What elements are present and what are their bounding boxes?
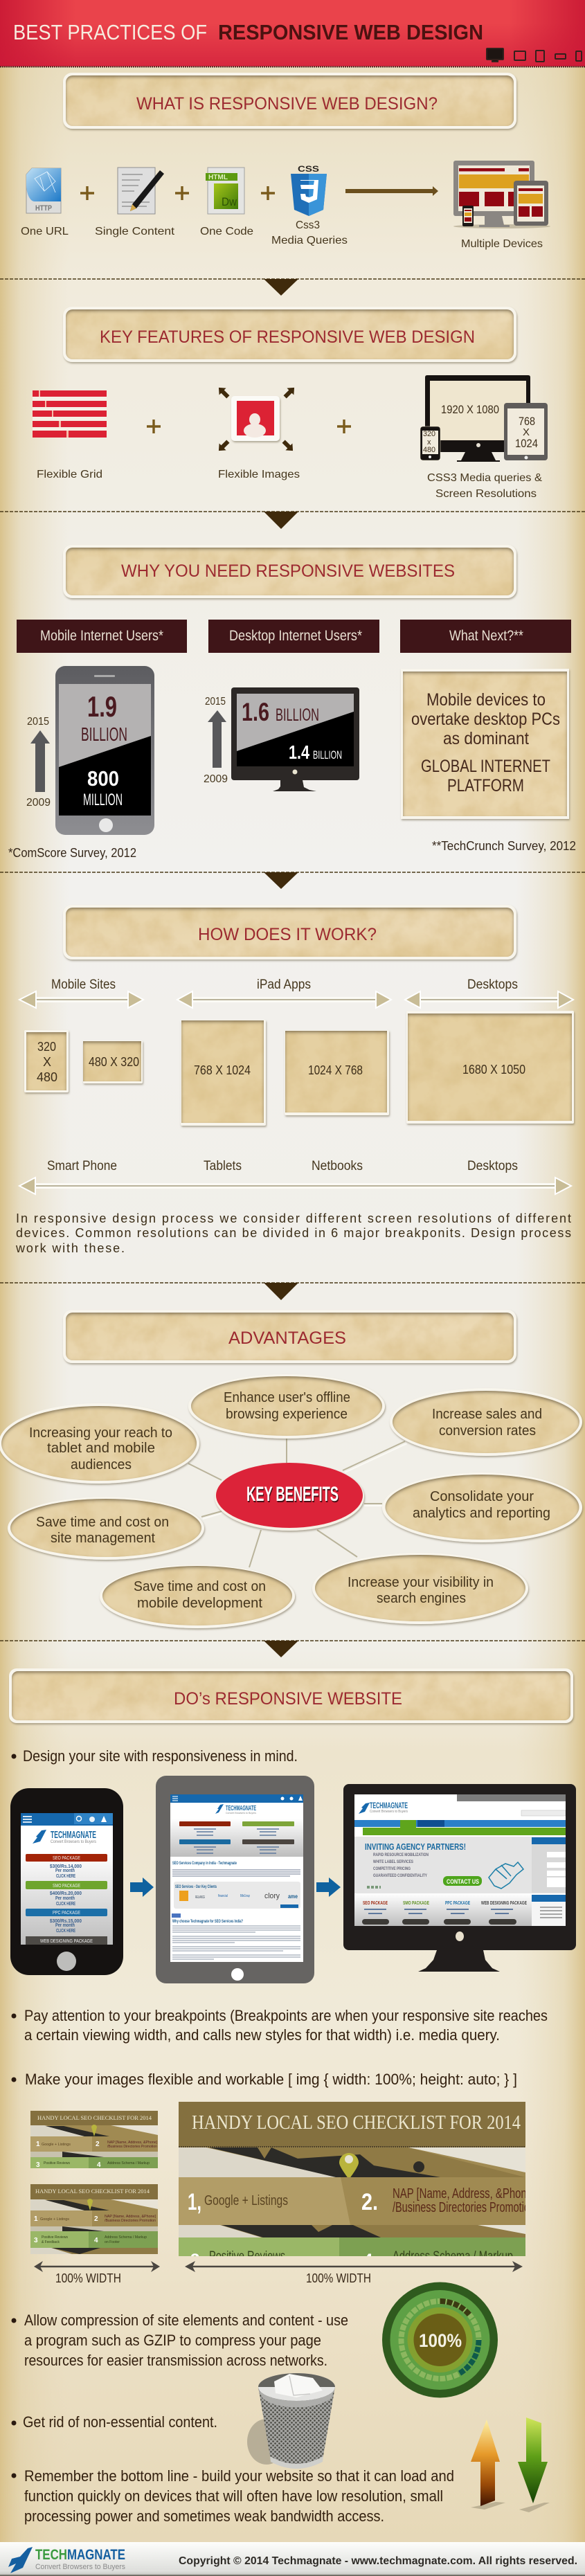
panel: do's responsive website bbox=[9, 1668, 576, 2525]
phone mockup: $300/Rs.15,000 bbox=[50, 1919, 82, 1924]
plus bbox=[175, 186, 189, 200]
header banner bbox=[0, 0, 585, 66]
icon: screen resolutions devices: Screen Resolutions bbox=[435, 488, 537, 500]
panel: key features bbox=[33, 307, 548, 500]
arrow: small image width: 100% WIDTH bbox=[55, 2271, 121, 2285]
box: 1680x1050 bbox=[406, 1011, 574, 1124]
text block: breakpoints: In responsive design process we consider different screen resolutions of different bbox=[16, 1212, 571, 1225]
text: bottom line tip bbox=[11, 2467, 454, 2525]
device type labels bbox=[47, 1159, 518, 1173]
phone mockup: CLICK HERE bbox=[56, 1929, 75, 1934]
breakpoint group labels: iPad Apps bbox=[257, 978, 311, 992]
arrow: up bbox=[471, 2420, 505, 2510]
text block: breakpoints bbox=[15, 1212, 571, 1255]
monitor mockup bbox=[343, 1784, 576, 1972]
text: design with responsiveness: Design your site with responsiveness in mind. bbox=[23, 1747, 298, 1765]
bubble: offline browsing: Enhance user's offline bbox=[224, 1390, 350, 1405]
heading box bbox=[9, 1668, 573, 1723]
desktop users monitor chart: 1.4 bbox=[289, 741, 309, 763]
box: 320x480: 480 bbox=[37, 1070, 57, 1084]
divider with arrow bbox=[0, 512, 585, 529]
small checklist image 1: 1 bbox=[36, 2141, 40, 2148]
bubble: mobile development: mobile development bbox=[137, 1596, 262, 1611]
label: Flexible Grid bbox=[37, 469, 102, 480]
panel: advantages bbox=[0, 1310, 582, 1628]
mobile users phone chart: 1.9 bbox=[87, 690, 117, 723]
bubble: key benefits: KEY BENEFITS bbox=[247, 1484, 339, 1507]
small checklist image 2: NAP [Name, Address, &Phone] bbox=[105, 2215, 156, 2219]
resolution labels: 768 bbox=[519, 415, 535, 428]
plus bbox=[147, 420, 161, 433]
desktop users monitor chart: 1.6 bbox=[242, 698, 269, 726]
logo: TECHMAGNATE bbox=[35, 2547, 125, 2563]
phone mockup: CLICK HERE bbox=[56, 1902, 75, 1907]
title: RESPONSIVE WEB DESIGN bbox=[218, 20, 483, 44]
icon: css3 shield: CSS bbox=[298, 164, 319, 174]
small checklist image 2: on Footer bbox=[105, 2240, 120, 2244]
logo: Convert Browsers to Buyers bbox=[35, 2563, 125, 2571]
large checklist image: Google + Listings bbox=[204, 2193, 288, 2208]
heading box: ADVANTAGES bbox=[228, 1328, 346, 1348]
arrow bbox=[345, 186, 438, 196]
box: 320x480: 320 bbox=[37, 1040, 56, 1054]
small checklist image 2: & Feedback bbox=[42, 2240, 60, 2244]
column header: what next bbox=[400, 620, 571, 653]
footnote: comscore: *ComScore Survey, 2012 bbox=[8, 846, 136, 860]
arrow: mobile sites range bbox=[19, 991, 143, 1008]
bubble: search visibility: search engines bbox=[377, 1591, 466, 1606]
phone mockup: SMO PACKAGE bbox=[53, 1884, 80, 1889]
label: Css3 bbox=[296, 219, 320, 231]
tablet mockup: Convert Browsers to Buyers bbox=[226, 1811, 256, 1814]
small checklist image 2: Address Schema / Markup bbox=[105, 2235, 147, 2240]
monitor mockup: COMPETITIVE PRICING bbox=[373, 1866, 411, 1871]
box: 768x1024 bbox=[181, 1020, 266, 1126]
icon: one code: HTML bbox=[208, 174, 228, 181]
icon: flexible grid bbox=[33, 390, 107, 480]
small checklist image 2 bbox=[30, 2184, 158, 2254]
text: compression tip: resources for easier transmission across networks. bbox=[24, 2352, 327, 2369]
small checklist image 2: 3 bbox=[34, 2237, 38, 2244]
tablet mockup: BillsGroup bbox=[240, 1894, 250, 1898]
phone mockup bbox=[10, 1788, 123, 1975]
monitor mockup: SMO PACKAGE bbox=[403, 1901, 429, 1906]
desktop growth arrow: 2015 bbox=[205, 696, 226, 708]
bubble: reach: audiences bbox=[71, 1457, 132, 1472]
box: 768x1024: 768 X 1024 bbox=[194, 1063, 251, 1077]
heading box: KEY FEATURES OF RESPONSIVE WEB DESIGN bbox=[100, 327, 475, 347]
resolution labels: 1024 bbox=[515, 437, 538, 450]
callout: what next: PLATFORM bbox=[447, 776, 524, 795]
resolution labels: 320 bbox=[423, 430, 435, 438]
icon: css3 shield bbox=[271, 164, 348, 246]
mobile users phone chart bbox=[55, 666, 154, 835]
heading box bbox=[63, 545, 516, 598]
monitor mockup: RAPID RESOURCE MOBILIZATION bbox=[373, 1853, 429, 1857]
label: Single Content bbox=[95, 226, 175, 237]
breakpoint group labels: Mobile Sites bbox=[51, 978, 116, 992]
large checklist image: HANDY LOCAL SEO CHECKLIST FOR 2014 bbox=[192, 2111, 521, 2134]
tablet mockup: Why choose Techmagnate for SEO Services India? bbox=[172, 1920, 243, 1924]
column header: desktop bbox=[208, 620, 379, 653]
label: Multiple Devices bbox=[461, 238, 543, 250]
bubble: mobile development: Save time and cost on bbox=[134, 1579, 266, 1594]
arrow bbox=[130, 1877, 154, 1897]
small checklist image 1 bbox=[30, 2111, 158, 2169]
desktop growth arrow bbox=[204, 696, 228, 785]
small checklist image 2: 1 bbox=[34, 2215, 38, 2223]
device type labels: Desktops bbox=[467, 1159, 518, 1173]
callout: what next bbox=[401, 669, 569, 819]
title bbox=[13, 20, 483, 44]
tablet mockup: ame bbox=[288, 1893, 298, 1900]
bubble: site management bbox=[8, 1497, 204, 1560]
heading box: WHAT IS RESPONSIVE WEB DESIGN? bbox=[136, 94, 438, 114]
heading box bbox=[63, 73, 516, 129]
bubble: analytics: analytics and reporting bbox=[413, 1506, 550, 1521]
mobile growth arrow: 2009 bbox=[26, 797, 51, 809]
phone mockup: $300/Rs.14,000 bbox=[50, 1864, 82, 1869]
desktop growth arrow: 2009 bbox=[204, 773, 228, 785]
small checklist image 1: 3 bbox=[36, 2161, 40, 2169]
plus bbox=[261, 186, 275, 200]
bubble: reach: tablet and mobile bbox=[47, 1441, 155, 1456]
label: CSS3 Media queries & bbox=[427, 472, 542, 484]
column header: what next: What Next?** bbox=[449, 628, 523, 644]
column header: desktop: Desktop Internet Users* bbox=[229, 628, 362, 644]
heading box: HOW DOES IT WORK? bbox=[198, 925, 377, 944]
desktop users monitor chart bbox=[231, 687, 359, 791]
phone mockup: Convert Browsers to Buyers bbox=[51, 1840, 96, 1844]
monitor mockup: INVITING AGENCY PARTNERS! bbox=[365, 1841, 466, 1852]
bubble: sales bbox=[390, 1388, 582, 1456]
small checklist image 1: Positive Reviews bbox=[44, 2161, 70, 2165]
small checklist image 1: Google + Listings bbox=[42, 2143, 71, 2147]
large checklist image: 4 bbox=[363, 2251, 373, 2269]
tablet mockup: TECHMAGNATE bbox=[226, 1805, 256, 1812]
arrow: large image width: 100% WIDTH bbox=[306, 2271, 371, 2285]
gauge: 100% bbox=[382, 2282, 498, 2398]
tablet mockup: clory bbox=[264, 1892, 280, 1900]
large checklist image: 1, bbox=[188, 2189, 201, 2215]
icon: css3 shield: Media Queries bbox=[271, 235, 348, 246]
phone mockup: Per month bbox=[55, 1868, 75, 1873]
text: breakpoints tip: a certain viewing width, and calls new styles for that width) i.e. media query. bbox=[24, 2026, 500, 2044]
small checklist image 1: 2 bbox=[96, 2141, 100, 2148]
arrow bbox=[316, 1877, 341, 1897]
box: 480x320: 480 X 320 bbox=[89, 1055, 139, 1069]
label: One URL bbox=[21, 226, 69, 237]
small checklist image 2: HANDY LOCAL SEO CHECKLIST FOR 2014 bbox=[35, 2188, 150, 2195]
arrow: large image width bbox=[185, 2261, 523, 2285]
box: 1680x1050: 1680 X 1050 bbox=[462, 1063, 525, 1077]
resolution labels: X bbox=[523, 426, 530, 438]
arrow: ipad apps range bbox=[177, 991, 391, 1008]
large checklist image bbox=[179, 2102, 525, 2256]
mobile growth arrow: 2015 bbox=[27, 716, 49, 728]
resolution labels: 480 bbox=[423, 446, 435, 454]
arrow: device range bbox=[19, 1178, 571, 1194]
copyright: Copyright © 2014 Techmagnate - www.techmagnate.com. All rights reserved. bbox=[179, 2555, 577, 2567]
tablet mockup: SEO Services - Our Key Clients bbox=[175, 1885, 217, 1889]
icon: single content bbox=[95, 168, 175, 237]
arrow: small image width bbox=[34, 2261, 160, 2285]
monitor mockup: CONTACT US bbox=[447, 1878, 479, 1885]
bubble: mobile development bbox=[100, 1565, 295, 1628]
heading box bbox=[63, 905, 516, 960]
title: BEST PRACTICES OF bbox=[13, 20, 207, 44]
icon: one URL bbox=[21, 168, 69, 237]
connectors bbox=[188, 1439, 407, 1567]
plus bbox=[337, 420, 351, 433]
small checklist image 1: HANDY LOCAL SEO CHECKLIST FOR 2014 bbox=[37, 2115, 152, 2121]
text: flexible images tip: Make your images flexible and workable [ img { width: 100%; height: auto; } ] bbox=[25, 2071, 517, 2088]
monitor mockup: PPC PACKAGE bbox=[445, 1901, 470, 1906]
heading box: DO’s RESPONSIVE WEBSITE bbox=[174, 1689, 402, 1709]
resolution labels bbox=[423, 403, 538, 454]
bubble: offline browsing bbox=[188, 1374, 385, 1439]
text: bottom line tip: processing power and sometimes weak bandwidth access. bbox=[24, 2507, 384, 2525]
bubble: analytics: Consolidate your bbox=[430, 1489, 534, 1504]
small checklist image 1: NAP [Name, Address, &Phone] bbox=[107, 2141, 157, 2145]
small checklist image 2: Google + Listings bbox=[40, 2217, 69, 2222]
icon: multiple devices bbox=[453, 161, 550, 250]
box: 1024x768: 1024 X 768 bbox=[308, 1063, 363, 1077]
heading box bbox=[63, 307, 516, 362]
label: One Code bbox=[200, 226, 253, 237]
label: Flexible Images bbox=[218, 469, 300, 480]
panel: why you need responsive websites bbox=[8, 545, 576, 860]
arrow: down bbox=[518, 2417, 550, 2512]
footer bbox=[0, 2542, 585, 2576]
footnote: techcrunch: **TechCrunch Survey, 2012 bbox=[432, 839, 576, 853]
large checklist image: 2. bbox=[361, 2189, 378, 2215]
icon: screen resolutions devices bbox=[420, 375, 548, 500]
text block: breakpoints: devices. Common resolutions can be divided in 6 major breakponits. Design process bbox=[16, 1226, 571, 1240]
mobile users phone chart: 800 bbox=[87, 766, 119, 791]
resolution labels: x bbox=[427, 438, 431, 447]
bubble: analytics bbox=[382, 1472, 582, 1542]
desktop users monitor chart: BILLION bbox=[276, 705, 319, 725]
bubble: reach bbox=[0, 1403, 199, 1484]
text: breakpoints tip: Pay attention to your breakpoints (Breakpoints are when your responsive site reaches bbox=[24, 2007, 548, 2024]
bubble: search visibility: Increase your visibility in bbox=[348, 1575, 494, 1590]
monitor mockup: SEO PACKAGE bbox=[363, 1901, 388, 1906]
bubble: reach: Increasing your reach to bbox=[29, 1425, 172, 1441]
panel: how does it work bbox=[15, 905, 574, 1255]
mobile growth arrow bbox=[26, 716, 51, 809]
mobile users phone chart: BILLION bbox=[81, 723, 127, 745]
small checklist image 2: 2 bbox=[94, 2215, 98, 2223]
text: compression tip: a program such as GZIP to compress your page bbox=[24, 2332, 321, 2349]
icon: one URL: HTTP bbox=[35, 204, 52, 213]
bubble: search visibility bbox=[312, 1553, 528, 1624]
monitor mockup: WEB DESIGNING PACKAGE bbox=[481, 1901, 527, 1906]
resolution labels: 1920 X 1080 bbox=[441, 403, 499, 416]
monitor mockup: TECHMAGNATE bbox=[370, 1801, 408, 1810]
device type labels: Smart Phone bbox=[47, 1159, 117, 1173]
text: bottom line tip: function quickly on devices that will often have low resolution, small bbox=[24, 2487, 443, 2505]
large checklist image: /Business Directories Promotion bbox=[393, 2200, 535, 2215]
phone mockup: SEO PACKAGE bbox=[53, 1856, 80, 1861]
text: compression tip: Allow compression of site elements and content - use bbox=[24, 2312, 348, 2329]
bubble: sales: conversion rates bbox=[439, 1423, 536, 1439]
divider with arrow bbox=[0, 1283, 585, 1300]
tablet mockup bbox=[156, 1776, 314, 1983]
phone mockup: PPC PACKAGE bbox=[53, 1911, 80, 1916]
large checklist image: 3 bbox=[190, 2251, 199, 2269]
phone mockup: $400/Rs.20,000 bbox=[50, 1891, 82, 1896]
text: breakpoints tip bbox=[11, 2007, 548, 2044]
box: 1024x768 bbox=[285, 1030, 389, 1115]
large checklist image: Positive Reviews bbox=[209, 2249, 285, 2264]
breakpoint group labels: Desktops bbox=[467, 978, 518, 992]
tablet mockup: SEO Services Company in India - Techmagnate bbox=[172, 1862, 237, 1866]
small checklist image 2: /Business Directories Promotion bbox=[105, 2219, 156, 2223]
icon: trash can bbox=[247, 2373, 335, 2469]
phone mockup: WEB DESIGNING PACKAGE bbox=[40, 1939, 93, 1944]
icon: device sizes bbox=[487, 48, 582, 62]
monitor mockup: GUARANTEED CONFIDENTIALITY bbox=[373, 1873, 427, 1878]
icon: one code bbox=[200, 168, 253, 237]
phone mockup: CLICK HERE bbox=[56, 1874, 75, 1879]
divider with arrow bbox=[0, 1641, 585, 1657]
desktop users monitor chart: BILLION bbox=[313, 748, 342, 762]
small checklist image 1: /Business Directories Promotion bbox=[107, 2145, 157, 2149]
column header: mobile: Mobile Internet Users* bbox=[40, 628, 163, 644]
text: non-essential content tip: Get rid of non-essential content. bbox=[23, 2413, 217, 2431]
text block: breakpoints: work with these. bbox=[15, 1241, 125, 1255]
tablet mockup: RELIANCE bbox=[195, 1895, 205, 1900]
bubble: key benefits: KEY BENEFITS bbox=[246, 1483, 339, 1506]
divider with arrow bbox=[0, 279, 585, 296]
tablet mockup: financial bbox=[218, 1894, 228, 1898]
heading box: WHY YOU NEED RESPONSIVE WEBSITES bbox=[121, 561, 455, 581]
bubble: offline browsing: browsing experience bbox=[226, 1407, 348, 1422]
device type labels: Tablets bbox=[204, 1159, 242, 1173]
breakpoint group labels bbox=[51, 978, 518, 992]
phone mockup: TECHMAGNATE bbox=[51, 1829, 96, 1841]
bubble: site management: site management bbox=[51, 1531, 155, 1546]
monitor mockup: WHITE LABEL SERVICES bbox=[373, 1859, 413, 1864]
callout: what next: overtake desktop PCs bbox=[411, 710, 560, 729]
monitor mockup: Convert Browsers to Buyers bbox=[370, 1810, 408, 1814]
text: compression tip bbox=[11, 2312, 348, 2369]
callout: what next: as dominant bbox=[443, 729, 529, 748]
callout: what next: GLOBAL INTERNET bbox=[421, 757, 550, 776]
box: 320x480 bbox=[24, 1030, 69, 1092]
bubble: site management: Save time and cost on bbox=[36, 1515, 169, 1530]
phone mockup: Per month bbox=[55, 1896, 75, 1901]
text: bottom line tip: Remember the bottom line - build your website so that it can load and bbox=[24, 2467, 454, 2485]
logo bbox=[8, 2547, 125, 2573]
large checklist image: NAP [Name, Address, &Phone bbox=[393, 2186, 532, 2201]
gauge: 100%: 100% bbox=[419, 2330, 462, 2351]
divider with arrow bbox=[0, 872, 585, 889]
column header: mobile bbox=[17, 620, 187, 653]
box: 320x480: X bbox=[43, 1055, 51, 1069]
small checklist image 2: Positive Reviews bbox=[42, 2235, 68, 2240]
bubble: key benefits bbox=[215, 1463, 364, 1531]
large checklist image: Address Schema / Markup bbox=[393, 2249, 513, 2264]
box: 480x320 bbox=[83, 1041, 143, 1083]
arrow: desktops range bbox=[405, 991, 573, 1008]
panel: what is responsive web design bbox=[21, 73, 550, 250]
icon: one code: Dw bbox=[222, 195, 237, 208]
small checklist image 1: 4 bbox=[97, 2161, 101, 2169]
plus bbox=[80, 186, 94, 200]
icon: flexible images bbox=[215, 384, 300, 480]
bubble: sales: Increase sales and bbox=[432, 1407, 542, 1422]
mobile users phone chart: MILLION bbox=[83, 791, 123, 809]
device type labels: Netbooks bbox=[312, 1159, 363, 1173]
small checklist image 2: 4 bbox=[94, 2237, 98, 2244]
phone mockup: Per month bbox=[55, 1923, 75, 1928]
small checklist image 1: Address Schema / Markup bbox=[107, 2161, 150, 2165]
heading box bbox=[63, 1310, 516, 1363]
callout: what next: Mobile devices to bbox=[426, 690, 546, 710]
